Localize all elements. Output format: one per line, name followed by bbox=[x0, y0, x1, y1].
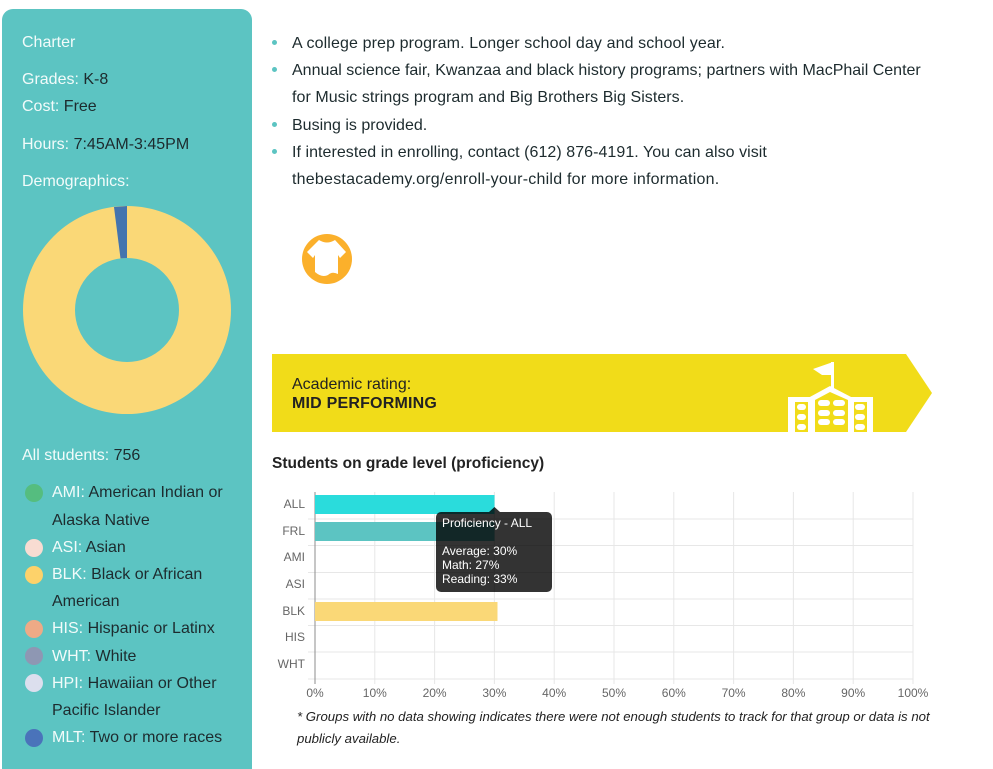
highlight: enrolling line 2: thebestacademy.org/enroll-your-child for more information. bbox=[292, 171, 719, 188]
legend item: BLK: BLK: Black or African bbox=[52, 566, 202, 583]
axis labels: 50% bbox=[602, 686, 626, 700]
axis labels: 80% bbox=[781, 686, 806, 700]
footnote: publicly available. bbox=[297, 731, 400, 746]
icon: uniform shirt bbox=[302, 234, 352, 284]
legend item: MLT: MLT: Two or more races bbox=[52, 729, 222, 746]
legend item continuation: HPI: Pacific Islander bbox=[52, 702, 160, 719]
legend item: ASI: ASI: Asian bbox=[52, 539, 126, 556]
axis labels: 90% bbox=[841, 686, 866, 700]
text block: program highlights bbox=[272, 35, 921, 188]
highlight: programs line 1: Annual science fair, Kwanzaa and black history programs; partners with MacPhail Center bbox=[292, 62, 921, 79]
bullet bbox=[272, 149, 277, 154]
panel: school summary sidebar bbox=[2, 9, 252, 769]
school type: Charter bbox=[22, 34, 75, 51]
grades: Grades: K-8 bbox=[22, 71, 108, 88]
axis labels: 30% bbox=[482, 686, 507, 700]
chart heading: Students on grade level (proficiency) bbox=[272, 455, 544, 472]
legend item continuation: AMI: Alaska Native bbox=[52, 512, 150, 529]
legend item: HIS: HIS: Hispanic or Latinx bbox=[52, 620, 215, 637]
category labels: BLK bbox=[282, 604, 305, 618]
axis labels: 10% bbox=[363, 686, 387, 700]
axis labels: 60% bbox=[662, 686, 686, 700]
bar: FRL bbox=[315, 522, 494, 541]
demographics heading: Demographics: bbox=[22, 173, 130, 190]
category labels bbox=[278, 497, 306, 671]
icon: school building bbox=[788, 362, 873, 432]
highlight: busing: Busing is provided. bbox=[292, 117, 427, 134]
bullet bbox=[272, 40, 277, 45]
legend dot: WHT bbox=[25, 647, 43, 665]
legend dot: HIS bbox=[25, 620, 43, 638]
axis labels: 20% bbox=[423, 686, 447, 700]
axis labels bbox=[306, 686, 929, 700]
donut chart: demographics bbox=[23, 206, 231, 414]
category labels: HIS bbox=[285, 630, 305, 644]
highlight: college prep: A college prep program. Longer school day and school year. bbox=[292, 35, 725, 52]
tooltip: Proficiency - ALL bbox=[442, 516, 532, 530]
legend dot: HPI bbox=[25, 674, 43, 692]
bar: BLK bbox=[315, 602, 498, 621]
category labels: AMI bbox=[284, 550, 305, 564]
hours: Hours: 7:45AM-3:45PM bbox=[22, 136, 189, 153]
tooltip bbox=[436, 507, 552, 592]
rating value: MID PERFORMING bbox=[292, 395, 437, 412]
category labels: ASI bbox=[286, 577, 305, 591]
footnote: * Groups with no data showing indicates there were not enough students to track for that group or data is not bbox=[297, 709, 930, 724]
axis labels: 70% bbox=[722, 686, 746, 700]
highlight: enrolling line 1: If interested in enrolling, contact (612) 876-4191. You can also visit bbox=[292, 144, 767, 161]
cost: Cost: Free bbox=[22, 98, 97, 115]
legend dot: ASI bbox=[25, 539, 43, 557]
axis labels: 100% bbox=[898, 686, 929, 700]
bullet bbox=[272, 67, 277, 72]
footnote bbox=[296, 709, 930, 746]
bar: ALL bbox=[315, 495, 494, 514]
legend item: HPI: HPI: Hawaiian or Other bbox=[52, 675, 217, 692]
total students: All students: 756 bbox=[22, 447, 140, 464]
legend item continuation: BLK: American bbox=[52, 593, 120, 610]
tooltip: Reading: 33% bbox=[442, 572, 518, 586]
legend item: WHT: WHT: White bbox=[52, 648, 136, 665]
bar chart: students on grade level bbox=[278, 492, 929, 700]
legend dot: MLT bbox=[25, 729, 43, 747]
banner: academic rating bbox=[272, 354, 932, 432]
axis labels: 40% bbox=[542, 686, 567, 700]
legend dot: AMI bbox=[25, 484, 43, 502]
highlight: programs line 2: for Music strings program and Big Brothers Big Sisters. bbox=[292, 89, 684, 106]
tooltip: Average: 30% bbox=[442, 544, 517, 558]
category labels: ALL bbox=[284, 497, 305, 511]
category labels: WHT bbox=[278, 657, 306, 671]
legend: demographic groups bbox=[25, 484, 223, 747]
axis labels: 0% bbox=[306, 686, 324, 700]
rating label: Academic rating: bbox=[292, 376, 411, 393]
legend dot: BLK bbox=[25, 566, 43, 584]
bullet bbox=[272, 122, 277, 127]
legend item: AMI: AMI: American Indian or bbox=[52, 484, 223, 501]
tooltip: Math: 27% bbox=[442, 558, 500, 572]
banner arrow shape bbox=[272, 354, 932, 432]
category labels: FRL bbox=[282, 524, 305, 538]
